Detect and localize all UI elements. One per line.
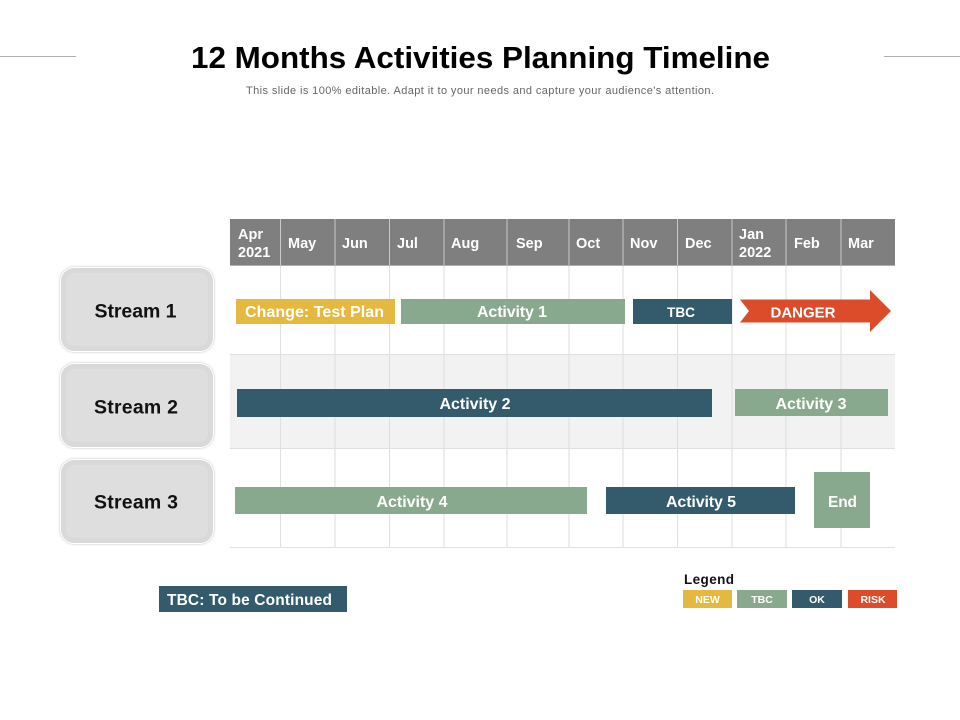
stream 1 label [60,267,214,352]
note: tbc definition [159,586,347,612]
month header: Sep [516,236,543,252]
stream 3 label: Stream 3 [94,492,178,514]
subtitle: This slide is 100% editable. Adapt it to your needs and capture your audience's attention. [246,85,714,97]
milestone: end: End [828,494,857,511]
stream 1 label: Stream 1 [94,300,177,322]
legend: TBC [751,594,773,606]
arrow: danger [740,290,891,332]
month header: Jan [739,227,764,243]
bar: change test plan: Change: Test Plan [245,304,384,321]
month header: Mar [848,236,874,252]
month header: 2021 [238,245,270,261]
bar: activity 4 [235,487,587,514]
stream 3 label [60,459,214,544]
title: 12 Months Activities Planning Timeline [191,40,770,75]
bar: activity 3: Activity 3 [776,396,847,413]
month header: Jun [342,236,368,252]
bar: activity 4: Activity 4 [376,494,448,511]
legend [683,572,897,608]
bar: activity 5 [606,487,795,514]
stream 2 label: Stream 2 [94,396,178,418]
month header: Dec [685,236,712,252]
milestone: end [814,472,870,528]
month header: Apr [238,227,263,243]
bar: activity 3 [735,389,888,416]
bar: activity 1 [401,299,625,324]
month header [230,219,895,266]
bar: activity 2 [237,389,712,417]
legend: RISK [860,594,886,606]
bar: tbc [633,299,732,324]
stream 2 label [60,363,214,448]
timeline grid [230,265,895,548]
month header: Oct [576,236,600,252]
bar: activity 1: Activity 1 [477,304,547,321]
month header: Jul [397,236,418,252]
legend: NEW [695,594,720,606]
month header: May [288,236,316,252]
arrow: danger: DANGER [770,306,836,322]
bar: activity 2: Activity 2 [440,396,511,413]
note: tbc definition: TBC: To be Continued [167,592,332,609]
month header: Nov [630,236,657,252]
month header: 2022 [739,245,771,261]
legend: OK [809,594,825,606]
bar: change test plan [236,299,395,324]
month header: Aug [451,236,479,252]
bar: activity 5: Activity 5 [666,494,736,511]
month header: Feb [794,236,820,252]
bar: tbc: TBC [667,305,695,320]
legend: Legend [684,572,734,587]
